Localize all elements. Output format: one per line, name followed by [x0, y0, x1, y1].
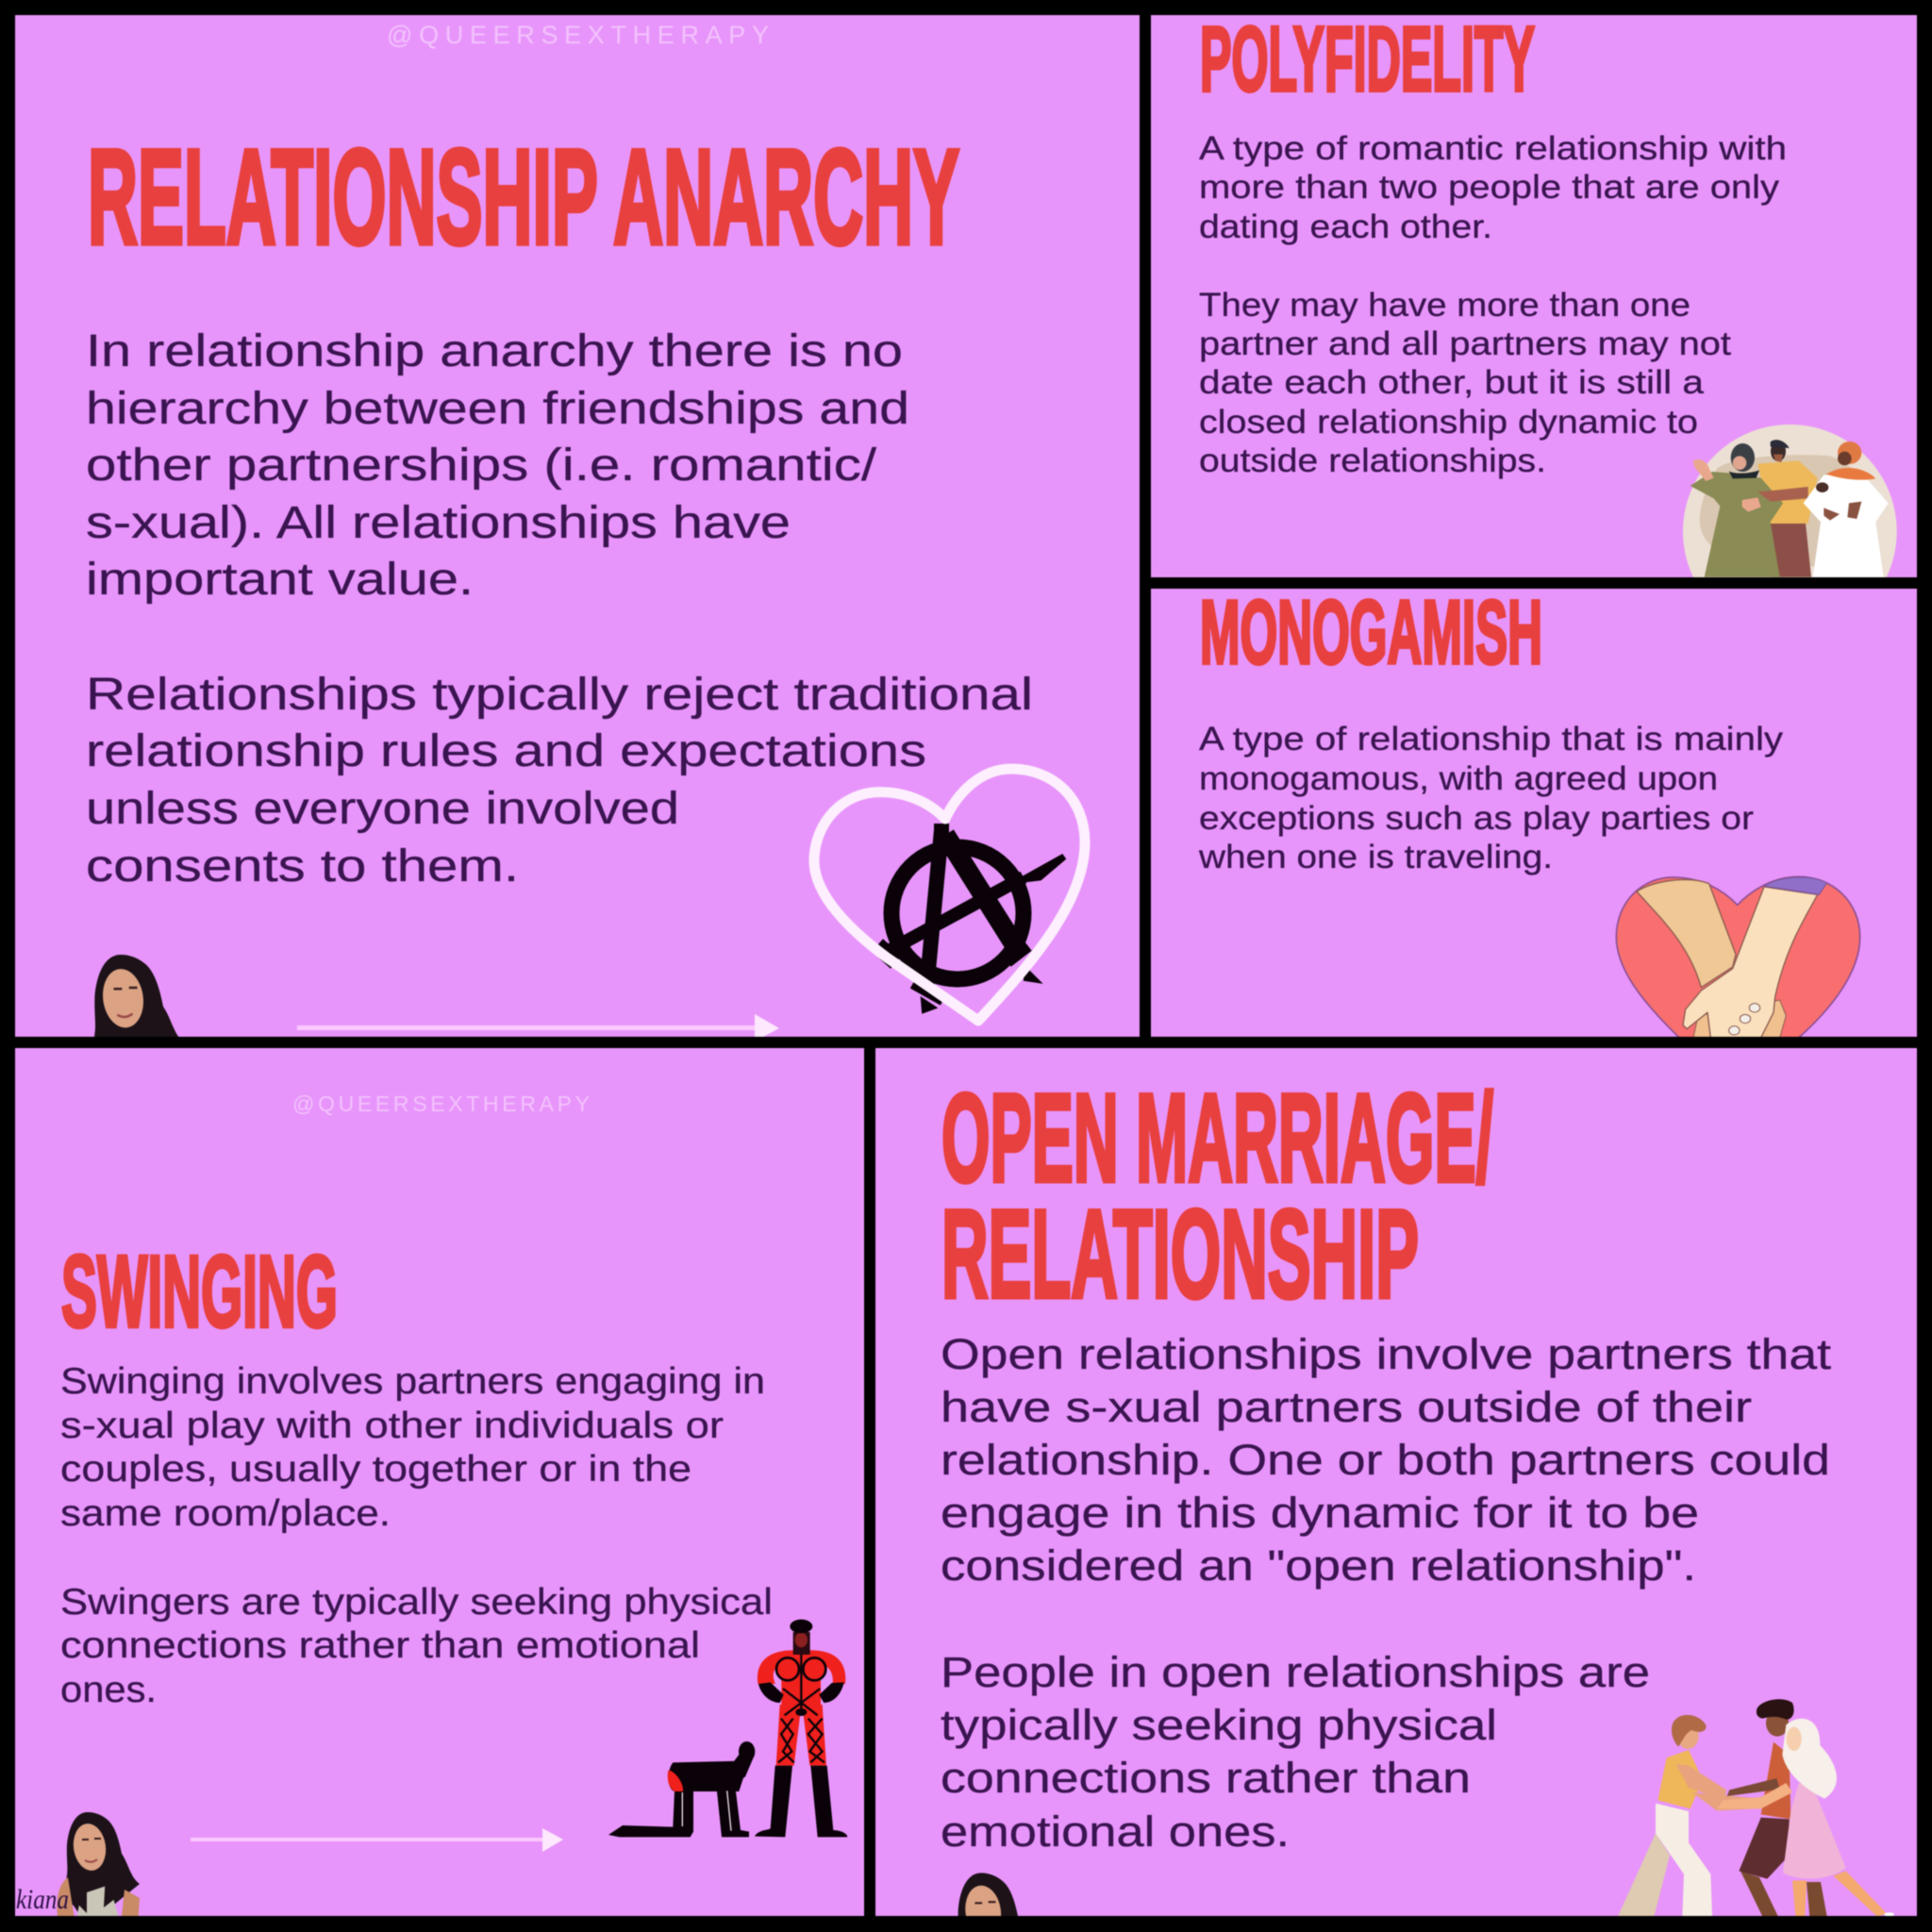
heading: RELATIONSHIP: [941, 1185, 1419, 1324]
icon: heart outline: [814, 769, 1085, 1021]
panel: polyfidelity: [1150, 14, 1918, 578]
body text: connections rather than emotional: [60, 1625, 700, 1666]
portrait: [93, 954, 179, 1038]
body text: s-xual play with other individuals or: [60, 1406, 724, 1446]
panel: open marriage / relationship: [875, 1048, 1917, 1932]
illustration: three people in circle: [1683, 425, 1898, 577]
body text: engage in this dynamic for it to be: [941, 1489, 1699, 1537]
body text: hierarchy between friendships and: [86, 384, 909, 434]
panel: relationship anarchy: [15, 15, 1140, 1095]
body text: People in open relationships are: [941, 1648, 1650, 1696]
body text: consents to them.: [86, 841, 519, 891]
signature: kiana: kiana: [16, 1884, 69, 1915]
heading: POLYFIDELITY: [1200, 8, 1535, 110]
body text: Swinging involves partners engaging in: [60, 1361, 765, 1402]
arrow: [296, 1013, 779, 1038]
body text: A type of romantic relationship with: [1199, 130, 1787, 167]
body text: ones.: [60, 1670, 157, 1710]
portrait: [957, 1872, 1019, 1917]
panel: monogamish: [1151, 582, 1917, 1038]
body text: important value.: [86, 555, 474, 605]
illustration: heart with holding hands: [1616, 876, 1860, 1038]
illustration: three people: [1618, 1699, 1894, 1917]
body text: A type of relationship that is mainly: [1199, 721, 1784, 758]
body text: other partnerships (i.e. romantic/: [86, 441, 877, 491]
illustration: two figures: [608, 1620, 847, 1837]
body text: [1199, 130, 1787, 479]
body text: have s-xual partners outside of their: [941, 1383, 1752, 1431]
watermark: @QUEERSEXTHERAPY: [292, 1091, 590, 1116]
body text: more than two people that are only: [1199, 169, 1780, 206]
body text: relationship. One or both partners could: [941, 1436, 1830, 1484]
body text: typically seeking physical: [941, 1701, 1497, 1749]
body text: date each other, but it is still a: [1199, 364, 1705, 401]
panel: swinging: [15, 1048, 864, 1924]
body text: They may have more than one: [1199, 287, 1690, 324]
body text: [60, 1361, 773, 1710]
body text: Swingers are typically seeking physical: [60, 1582, 773, 1623]
heading: RELATIONSHIP ANARCHY: [88, 123, 959, 273]
portrait: [57, 1812, 140, 1924]
heading: [941, 1087, 1494, 1302]
body text: Open relationships involve partners that: [941, 1330, 1832, 1378]
body text: when one is traveling.: [1198, 839, 1553, 875]
body text: monogamous, with agreed upon: [1199, 760, 1718, 797]
body text: partner and all partners may not: [1199, 325, 1731, 362]
body text: unless everyone involved: [86, 784, 679, 834]
body text: emotional ones.: [941, 1807, 1290, 1856]
body text: Relationships typically reject traditional: [86, 670, 1033, 720]
body text: same room/place.: [60, 1493, 391, 1534]
body text: s-xual). All relationships have: [86, 498, 791, 548]
body text: [86, 326, 1033, 891]
heading: MONOGAMISH: [1200, 582, 1542, 683]
body text: relationship rules and expectations: [86, 726, 926, 776]
body text: exceptions such as play parties or: [1199, 800, 1754, 837]
body text: [941, 1330, 1832, 1856]
arrow: [191, 1828, 563, 1852]
body text: dating each other.: [1199, 208, 1492, 245]
body text: [1198, 721, 1784, 875]
body text: outside relationships.: [1199, 442, 1546, 479]
heading: SWINGING: [61, 1234, 338, 1348]
body text: couples, usually together or in the: [60, 1449, 691, 1490]
body text: connections rather than: [941, 1754, 1471, 1802]
body text: considered an "open relationship".: [941, 1541, 1696, 1590]
body text: closed relationship dynamic to: [1199, 404, 1698, 441]
icon: anarchy symbol: [877, 828, 1064, 1011]
watermark: @QUEERSEXTHERAPY: [387, 21, 769, 49]
body text: In relationship anarchy there is no: [86, 326, 903, 376]
